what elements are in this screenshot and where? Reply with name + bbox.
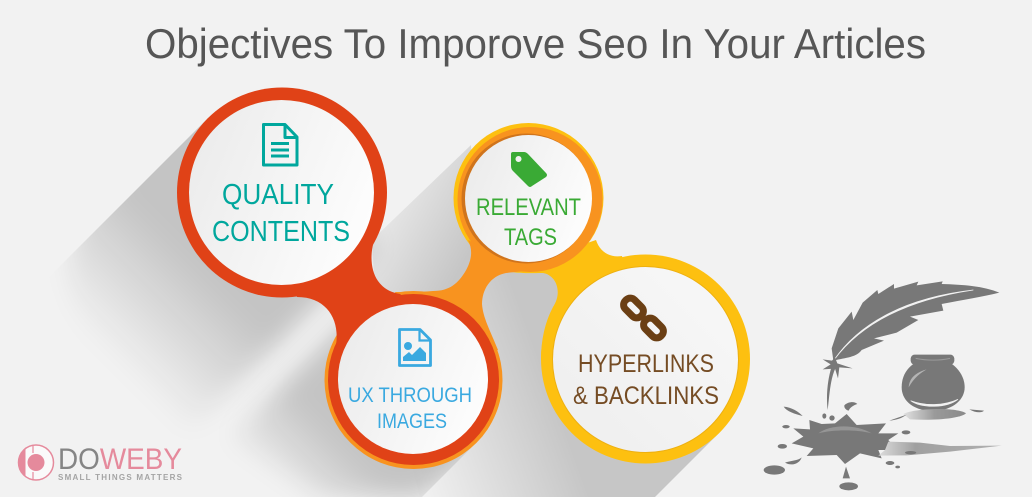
icon: ink pot: [902, 355, 984, 420]
label: quality: QUALITY: [222, 179, 334, 211]
icon: feather: [823, 281, 999, 410]
panel: relevant tags: [465, 135, 592, 262]
logo: doweby: [18, 443, 183, 482]
panel: hyperlinks and backlinks: [553, 267, 738, 452]
label: tags: TAGS: [504, 224, 557, 251]
label: relevant: RELEVANT: [476, 194, 581, 221]
label: hyperlinks: HYPERLINKS: [578, 350, 714, 378]
icon: image file: [400, 330, 430, 366]
label: images: IMAGES: [377, 410, 447, 433]
illustration: quill, ink pot and splat: [764, 281, 1002, 490]
logo mark: [18, 445, 54, 480]
icon: document: [264, 124, 297, 165]
long shadows: [68, 100, 719, 497]
label: ux through: UX THROUGH: [348, 384, 472, 407]
panel: ux through images: [338, 304, 488, 454]
label: contents: CONTENTS: [212, 216, 350, 248]
label: and backlinks: & BACKLINKS: [573, 382, 719, 410]
logo tagline: SMALL THINGS MATTERS: [58, 473, 183, 482]
icon: tag: [511, 152, 547, 187]
icon: chain links: [621, 296, 666, 340]
title: Objectives To Imporove Seo In Your Articles: [145, 20, 926, 67]
orange connector and rings: [324, 127, 602, 469]
icon: ink splat: [764, 402, 1002, 490]
panel: quality contents: [189, 100, 374, 285]
logo wordmark: DOWEBY: [58, 443, 182, 476]
inner ring shading: [462, 134, 739, 453]
yellow connector and ring: [454, 123, 750, 464]
red connector and rings: [177, 88, 499, 465]
